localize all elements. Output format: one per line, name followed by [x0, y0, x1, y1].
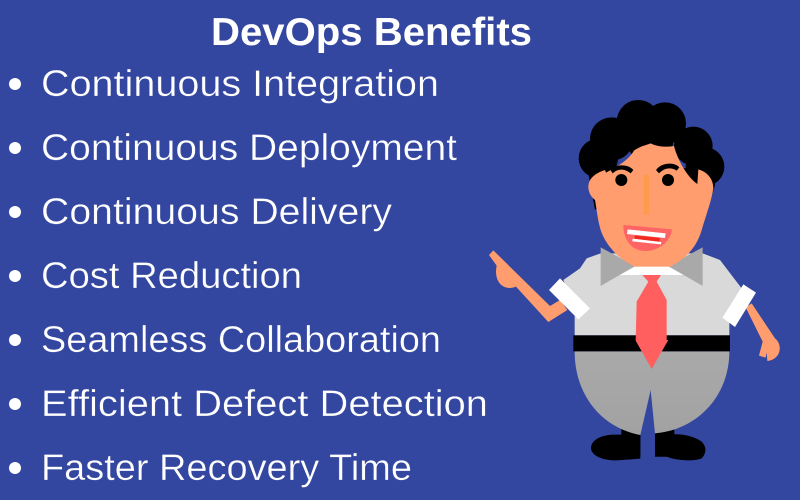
left cuff	[549, 278, 590, 319]
right cuff	[722, 284, 756, 327]
left eye	[615, 174, 627, 186]
item: cost reduction: Cost Reduction	[41, 255, 302, 296]
collar	[620, 267, 683, 275]
illustration: pointing businessman	[489, 100, 780, 460]
item: faster recovery time: Faster Recovery Time	[41, 447, 412, 488]
right eye	[662, 174, 674, 186]
title: DevOps Benefits	[211, 11, 532, 54]
trousers	[575, 351, 729, 435]
hair	[579, 100, 724, 186]
item: seamless collaboration: Seamless Collaboration	[41, 319, 441, 360]
belt	[573, 335, 730, 351]
mouth	[623, 225, 672, 251]
shirt	[563, 253, 742, 335]
benefits list	[9, 63, 488, 488]
left arm pointing	[489, 250, 567, 322]
right arm	[746, 303, 780, 361]
left eyebrow	[610, 165, 633, 173]
item: continuous delivery: Continuous Delivery	[41, 191, 393, 232]
face	[588, 143, 713, 267]
necktie	[636, 275, 668, 369]
nose	[644, 175, 649, 214]
legs and shoes	[591, 428, 705, 460]
bow tie left	[601, 247, 635, 286]
back hair	[588, 167, 715, 213]
bow tie right	[668, 247, 703, 286]
item: efficient defect detection: Efficient Defect Detection	[41, 383, 488, 424]
item: continuous deployment: Continuous Deployment	[41, 127, 458, 168]
right eyebrow	[656, 164, 679, 173]
item: continuous integration: Continuous Integration	[41, 63, 439, 104]
